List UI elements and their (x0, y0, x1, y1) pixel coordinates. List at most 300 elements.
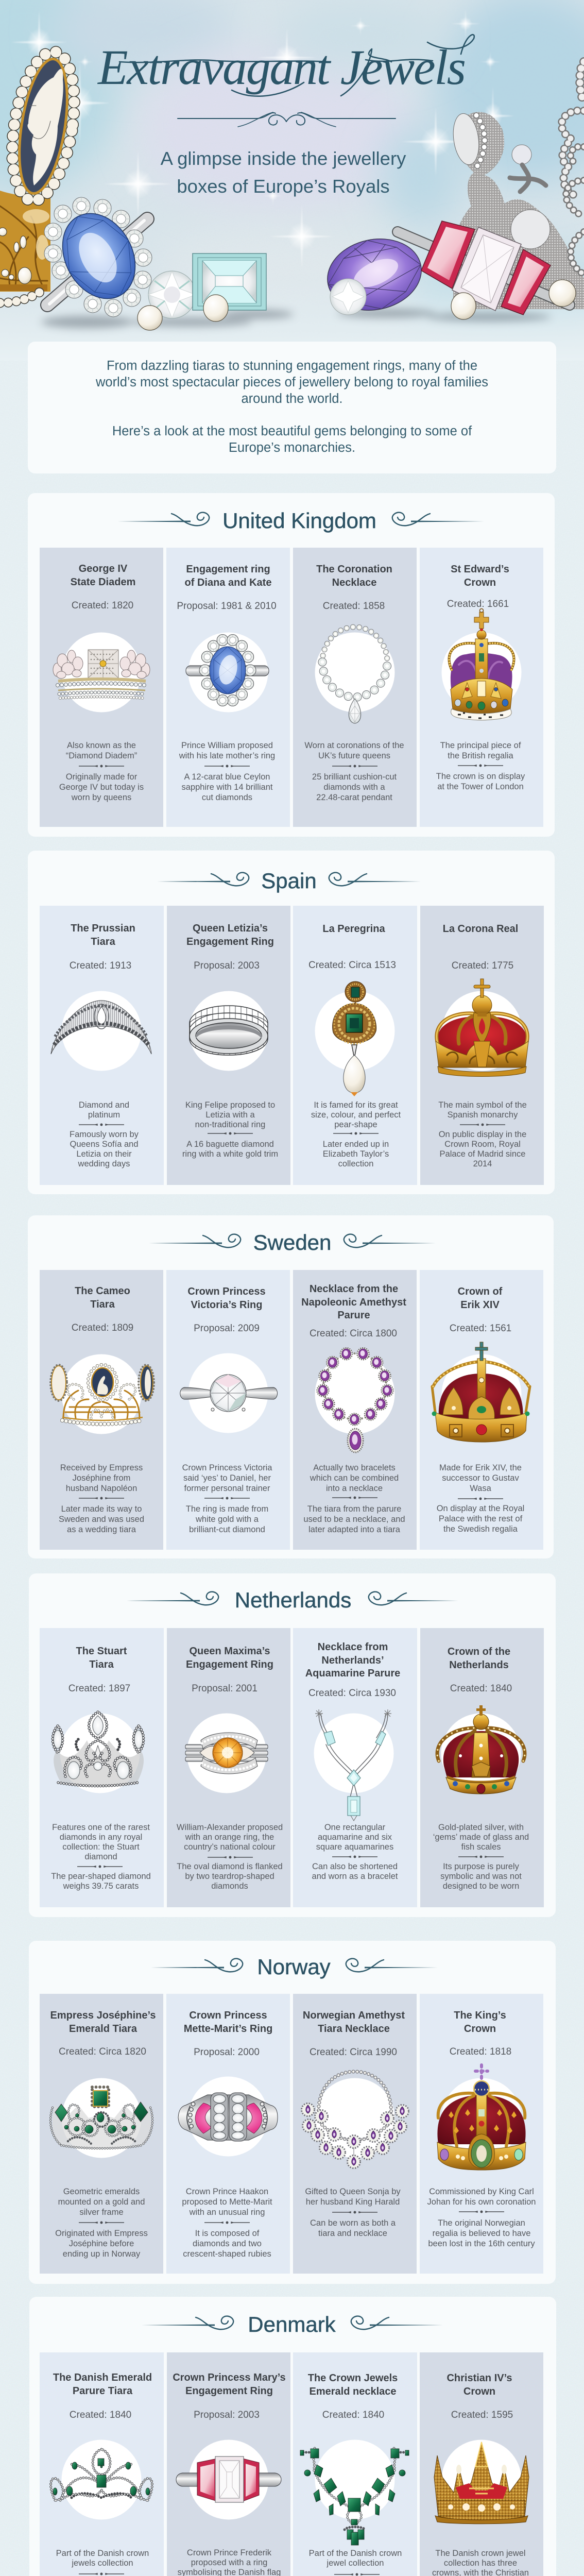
date: Created: 1818 (450, 2046, 511, 2057)
description: Part of the Danish crown (309, 2549, 402, 2558)
description: Can also be shortened (312, 1862, 398, 1871)
card title: Crown Princess (187, 1286, 266, 1297)
card title: Necklace from (318, 1641, 388, 1653)
description: diamonds in any royal (60, 1833, 142, 1842)
description: diamond (84, 1852, 117, 1861)
description (294, 1100, 418, 1130)
description: Worn at coronations of the (304, 741, 404, 750)
description (39, 1872, 163, 1891)
description: as a wedding tiara (67, 1525, 136, 1534)
heading: Sweden: Sweden (253, 1230, 331, 1255)
card title: Crown (464, 577, 496, 588)
sapphire ring (44, 197, 152, 317)
illustration: baguette diamond ring (167, 967, 290, 1095)
subtitle (161, 148, 406, 197)
illustration: aquamarine necklace (293, 1689, 417, 1818)
description (40, 1504, 163, 1535)
card title: The Prussian (71, 923, 135, 934)
card title (168, 1645, 291, 1671)
ruby three-stone ring (398, 221, 570, 315)
card title (166, 2009, 290, 2036)
card title: Crown Princess (189, 2010, 267, 2021)
description (293, 1504, 416, 1535)
illustration: sapphire ring (185, 633, 269, 712)
description: brilliant-cut diamond (189, 1525, 265, 1534)
panel: Sweden (28, 1215, 554, 1558)
description: into a necklace (326, 1484, 383, 1493)
heading: Netherlands: Netherlands (235, 1588, 351, 1612)
panel: Netherlands (29, 1573, 556, 1917)
description: George IV but today is (59, 783, 144, 792)
description (419, 1862, 543, 1891)
date: Created: 1913 (70, 960, 131, 971)
description: On display at the Royal (437, 1504, 524, 1513)
description: jewels collection (72, 2558, 133, 2568)
description: A 12-carat blue Ceylon (184, 772, 270, 782)
date: Created: 1820 (72, 600, 133, 611)
description: Sweden and was used (59, 1515, 144, 1524)
card title: Crown (463, 2386, 495, 2397)
description: with an orange ring, the (185, 1833, 274, 1842)
description (41, 2549, 164, 2568)
description: cut diamonds (202, 793, 252, 802)
illustration: ruby and diamond ring (167, 2415, 290, 2544)
title text: Extravagant Jewels (97, 40, 466, 95)
card title (40, 1645, 163, 1671)
heading: Denmark: Denmark (248, 2312, 336, 2336)
heading: United Kingdom (118, 509, 483, 533)
card title: Crown (464, 2023, 496, 2035)
description: Also known as the (67, 741, 136, 750)
panel: United Kingdom (28, 493, 555, 837)
card: The Prussian Tiara (40, 906, 164, 1185)
panel: introduction (28, 342, 556, 473)
description (165, 2228, 289, 2260)
card title (418, 2009, 542, 2036)
description (419, 740, 542, 761)
illustration: St Edward's crown (442, 608, 521, 720)
card: The Crown Jewels Emerald necklace (293, 2352, 417, 2576)
card: Necklace from Netherlands' Aquamarine Parure (293, 1628, 417, 1907)
date: Created: Circa 1820 (59, 2046, 146, 2057)
description: The Danish crown jewel (435, 2549, 526, 2558)
description: with his late mother’s ring (179, 751, 275, 760)
description: silver frame (79, 2208, 124, 2217)
card title (292, 2009, 416, 2036)
description (304, 741, 404, 760)
card: La Peregrina (293, 906, 417, 1185)
hero jewellery illustration (0, 14, 584, 333)
description: A 16 baguette diamond (186, 1140, 274, 1149)
description: collection has three (444, 2558, 517, 2568)
description: pear-shape (334, 1120, 377, 1129)
description: Originated with Empress (55, 2229, 148, 2238)
description: Joséphine before (69, 2239, 134, 2248)
description: diamonds and two (193, 2239, 262, 2248)
card: The Stuart Tiara (40, 1628, 164, 1907)
description: UK’s future queens (318, 751, 390, 760)
illustration: orange diamond ring (167, 1689, 290, 1818)
card: Crown Princess Victoria's Ring (166, 1270, 290, 1550)
description: aquamarine and six (318, 1833, 392, 1842)
card title: Aquamarine Parure (305, 1668, 400, 1679)
cameo mirror (0, 47, 83, 303)
card title: Crown of the (448, 1646, 510, 1657)
card title: The Danish Emerald (53, 2372, 152, 2383)
description: The principal piece of (440, 741, 521, 750)
card title: Empress Joséphine’s (50, 2010, 156, 2021)
illustration: Prussian tiara (40, 967, 163, 1095)
description (167, 2548, 291, 2576)
card title (41, 1285, 164, 1311)
illustration: La Peregrina pendant (293, 967, 417, 1095)
card title: Parure (337, 1310, 370, 1321)
card title: Necklace from the (310, 1283, 398, 1295)
description: Johan for his own coronation (427, 2197, 536, 2207)
card title (71, 563, 135, 588)
card: The Cameo Tiara (40, 1270, 163, 1550)
card title: Napoleonic Amethyst (301, 1297, 406, 1308)
description: the Swedish regalia (443, 1524, 518, 1534)
card title: The Crown Jewels (308, 2372, 398, 2384)
card: La Corona Real (420, 906, 544, 1185)
ground shadows (41, 309, 551, 328)
card title (167, 2371, 291, 2398)
description (66, 741, 137, 760)
description (165, 1504, 289, 1535)
card title: Queen Letizia’s (193, 923, 268, 934)
description: Palace of Madrid since (440, 1149, 525, 1159)
sparkles (11, 9, 514, 269)
illustration: Stuart tiara (40, 1689, 163, 1818)
date: Created: 1897 (68, 1683, 130, 1694)
card title: George IV (79, 563, 127, 574)
illustration: Mette-Marit ring (166, 2054, 290, 2182)
intro paragraph 1: From dazzling tiaras to stunning engagement rings, many of the (107, 359, 477, 373)
illustration: George IV diadem (53, 633, 150, 712)
intro paragraph 1: world’s most spectacular pieces of jewellery belong to royal families (96, 375, 488, 389)
card title: Engagement Ring (186, 1659, 273, 1670)
card title (292, 1283, 416, 1323)
description (419, 1463, 542, 1494)
card: Queen Maxima's Engagement Ring (167, 1628, 290, 1907)
card title (291, 1641, 415, 1681)
description: the British regalia (448, 751, 513, 760)
card: Crown Princess Mary's Engagement Ring (167, 2352, 290, 2576)
date: Created: Circa 1513 (308, 960, 396, 971)
date: Proposal: 2001 (192, 1683, 257, 1694)
description: crescent-shaped rubies (183, 2249, 271, 2259)
heading: Denmark (142, 2311, 443, 2337)
description: former personal trainer (184, 1484, 270, 1493)
description (40, 2187, 163, 2218)
illustration: The King's crown (420, 2054, 543, 2182)
description: Later made its way to (61, 1504, 142, 1514)
title flourishes (119, 35, 474, 96)
heading: Sweden (149, 1229, 436, 1255)
date: Created: 1561 (450, 1323, 511, 1334)
card title: Norwegian Amethyst (303, 2010, 405, 2021)
description: Features one of the rarest (52, 1823, 150, 1832)
description: Gold-plated silver, with (438, 1823, 524, 1832)
illustration: Crown of Erik XIV (420, 1330, 543, 1459)
description (168, 1823, 291, 1852)
illustration: Danish emerald tiara (40, 2415, 163, 2544)
description: worn by queens (72, 793, 131, 802)
description: platinum (88, 1110, 120, 1120)
description: wedding days (78, 1159, 130, 1168)
illustration: amethyst necklace (293, 1330, 417, 1459)
description: Originally made for (66, 772, 137, 782)
date: Created: Circa 1930 (308, 1688, 396, 1699)
card title (291, 2372, 415, 2398)
illustration: Christian IV's crown (420, 2415, 543, 2544)
card title: Tiara (91, 936, 115, 947)
card title: Necklace (332, 577, 376, 588)
heading: Spain: Spain (261, 869, 317, 893)
illustration: emerald necklace (293, 2415, 417, 2544)
card title: Netherlands’ (321, 1655, 384, 1666)
description: 25 brilliant cushion-cut (312, 772, 397, 782)
card title: Crown Princess Mary’s (173, 2372, 286, 2383)
description: The oval diamond is flanked (177, 1862, 283, 1871)
description (168, 1862, 291, 1891)
description: Crown Princess Victoria (182, 1463, 272, 1472)
heading: Norway: Norway (257, 1955, 331, 1979)
description: used to be a necklace, and (303, 1515, 405, 1524)
card title: Emerald necklace (309, 2386, 397, 2397)
card title (418, 2372, 541, 2398)
card: Crown of the Netherlands (420, 1628, 544, 1907)
card title: Engagement ring (186, 564, 270, 575)
date: Proposal: 2003 (194, 960, 260, 971)
card: Empress Joséphine's Emerald Tiara (40, 1994, 163, 2274)
description: It is famed for its great (314, 1100, 398, 1110)
illustration: La Corona Real (420, 967, 544, 1095)
date: Created: 1840 (322, 2410, 384, 2420)
description (294, 2549, 417, 2568)
description (40, 1463, 163, 1494)
date: Created: 1840 (70, 2410, 131, 2420)
description: Made for Erik XIV, the (439, 1463, 522, 1472)
description: weighs 39.75 carats (63, 1882, 139, 1891)
description: Gifted to Queen Sonja by (305, 2187, 401, 2196)
card title: Engagement Ring (185, 2385, 273, 2397)
description: Prince William proposed (181, 741, 273, 750)
card title (451, 564, 509, 588)
description: 22.48-carat pendant (316, 793, 392, 802)
illustration: cameo tiara (40, 1330, 163, 1459)
description: successor to Gustav (442, 1473, 519, 1483)
description: Its purpose is purely (443, 1862, 519, 1871)
intro paragraph 2: Here’s a look at the most beautiful gems belonging to some of (112, 424, 472, 438)
description (59, 772, 144, 802)
description: On public display in the (439, 1130, 526, 1139)
heading: United Kingdom: United Kingdom (222, 509, 376, 533)
description (419, 771, 542, 792)
description (293, 1823, 417, 1852)
illustration: Crown of the Netherlands (420, 1689, 544, 1818)
intro paragraph 2 (112, 424, 472, 455)
description: designed to be worn (443, 1882, 519, 1891)
subtitle: boxes of Europe’s Royals (177, 176, 390, 197)
card: Crown of Erik XIV (420, 1270, 543, 1550)
description: 2014 (473, 1159, 492, 1168)
description: mounted on a gold and (58, 2197, 145, 2207)
description: diamonds (211, 1882, 248, 1891)
card title: The Coronation (316, 564, 392, 575)
description: regalia is believed to have (433, 2229, 530, 2238)
description (165, 2187, 289, 2218)
description: her husband King Harald (306, 2197, 400, 2207)
description: symbolic and was not (440, 1872, 522, 1881)
illustration: amethyst tiara necklace (293, 2054, 417, 2182)
description (419, 1823, 543, 1852)
card title: Engagement Ring (186, 936, 274, 947)
card title: Tiara (89, 1659, 114, 1670)
date: Created: 1775 (452, 960, 513, 971)
description: The ring is made from (186, 1504, 268, 1514)
card title (185, 564, 271, 588)
date: Proposal: 2009 (194, 1323, 260, 1334)
description (179, 741, 275, 760)
illustration: coronation necklace (315, 624, 394, 723)
subtitle: A glimpse inside the jewellery (161, 148, 406, 169)
card title: Tiara (90, 1299, 115, 1310)
card title (417, 1646, 541, 1672)
description: Commissioned by King Carl (429, 2187, 534, 2196)
description: Famously worn by (70, 1130, 139, 1139)
silver tiara behind ring (450, 62, 584, 309)
aquamarine (193, 253, 266, 310)
card title (41, 2009, 165, 2036)
loose pearls (138, 280, 576, 330)
date: Proposal: 2003 (194, 2410, 260, 2420)
description: It is composed of (195, 2229, 259, 2238)
card: The Danish Emerald Parure Tiara (40, 2352, 164, 2576)
description: ‘gems’ made of glass and (433, 1833, 529, 1842)
heading: Netherlands (127, 1587, 460, 1613)
card title: State Diadem (71, 577, 135, 588)
illustration: emerald tiara (40, 2054, 163, 2182)
description: square aquamarines (316, 1842, 393, 1852)
card: Engagement ring of Diana and Kate (166, 548, 290, 827)
card title (165, 1285, 288, 1312)
card title: Netherlands (449, 1659, 509, 1671)
description: Elizabeth Taylor’s (323, 1149, 389, 1159)
description (293, 1463, 416, 1494)
card title: Emerald Tiara (69, 2023, 137, 2035)
description: Diamond and (79, 1100, 129, 1110)
description: jewel collection (327, 2558, 384, 2568)
description: proposed with a ring (191, 2558, 267, 2567)
description: Letizia with a (205, 1110, 255, 1120)
card title (41, 922, 165, 948)
description (39, 1823, 163, 1862)
heading: Norway (151, 1954, 438, 1979)
card title: Tiara Necklace (318, 2023, 390, 2035)
description: Palace with the rest of (439, 1514, 522, 1523)
card: Necklace from the Napoleonic Amethyst Parure (293, 1270, 417, 1550)
description: at the Tower of London (437, 782, 524, 791)
description: later adapted into a tiara (308, 1525, 400, 1534)
description: by two teardrop-shaped (185, 1872, 274, 1881)
description: Queens Sofía and (70, 1140, 138, 1149)
description: diamonds with a (323, 783, 385, 792)
round diamond (148, 271, 196, 318)
description (168, 1140, 292, 1159)
description: non-traditional ring (195, 1120, 265, 1129)
description: and worn as a bracelet (312, 1872, 398, 1881)
card title: Christian IV’s (446, 2372, 512, 2384)
card title: of Diana and Kate (185, 577, 271, 588)
card: The Coronation Necklace (293, 548, 417, 827)
panel: Norway (29, 1941, 556, 2284)
description: fish scales (461, 1842, 501, 1852)
amethyst (321, 230, 428, 319)
heading: Spain (157, 868, 421, 893)
description: Spanish monarchy (448, 1110, 518, 1120)
card title: Victoria’s Ring (191, 1299, 262, 1311)
card title: The King’s (454, 2010, 506, 2021)
description: with an unusual ring (190, 2208, 265, 2217)
description (168, 1100, 292, 1130)
date: Created: Circa 1800 (310, 1328, 397, 1339)
description: Actually two bracelets (313, 1463, 396, 1472)
panel: Denmark (29, 2297, 556, 2576)
card title (418, 1285, 542, 1312)
description: The tiara from the parure (307, 1504, 401, 1514)
description: tiara and necklace (318, 2229, 387, 2238)
description: The original Norwegian (438, 2218, 525, 2228)
date: Proposal: 1981 & 2010 (177, 601, 277, 612)
description: Wasa (470, 1484, 491, 1493)
description (294, 1140, 418, 1169)
card title (168, 922, 292, 948)
description (42, 1130, 166, 1169)
description (420, 2187, 543, 2207)
card title: Mette-Marit’s Ring (184, 2023, 272, 2035)
date: Created: 1809 (72, 1323, 133, 1333)
description: The crown is on display (436, 772, 525, 781)
intro paragraph 1 (96, 359, 488, 406)
description: ending up in Norway (63, 2249, 140, 2259)
description: collection: the Stuart (62, 1842, 140, 1852)
card: Norwegian Amethyst Tiara Necklace (293, 1994, 417, 2274)
description: Joséphine from (73, 1473, 130, 1483)
description: The main symbol of the (438, 1100, 527, 1110)
description: The pear-shaped diamond (51, 1872, 151, 1881)
description: proposed to Mette-Marit (182, 2197, 272, 2207)
description (312, 772, 397, 802)
description: Can be worn as both a (310, 2218, 396, 2228)
card title: St Edward’s (451, 564, 509, 575)
title divider ornament (178, 112, 396, 127)
description: Letizia on their (76, 1149, 132, 1159)
description: sapphire with 14 brilliant (181, 783, 273, 792)
description (291, 2218, 415, 2239)
description: Geometric emeralds (63, 2187, 140, 2196)
card title: The Cameo (75, 1285, 130, 1297)
card: Christian IV's Crown (420, 2352, 543, 2576)
date: Created: 1858 (323, 601, 385, 612)
date: Proposal: 2000 (194, 2047, 260, 2058)
description: King Felipe proposed to (185, 1100, 275, 1110)
description: Later ended up in (323, 1140, 389, 1149)
intro paragraph 1: around the world. (241, 392, 343, 406)
description (420, 2218, 543, 2249)
description: Crown Prince Frederik (187, 2548, 271, 2557)
